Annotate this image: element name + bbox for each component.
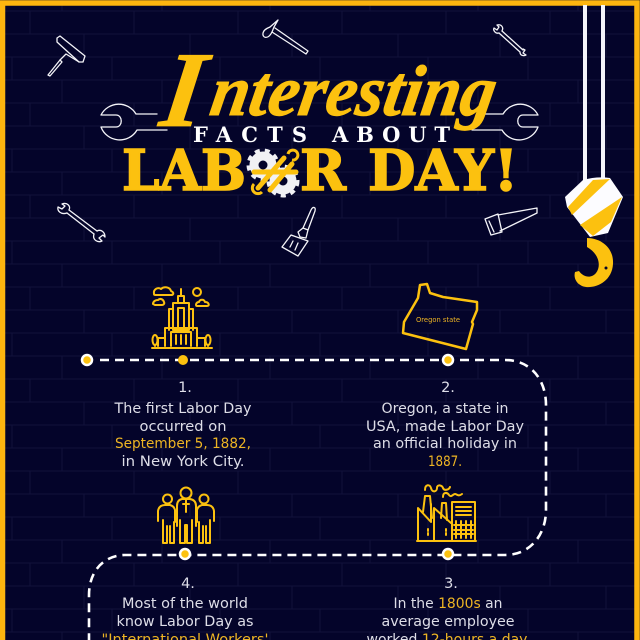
icon: Oregon state map (403, 284, 477, 349)
fact 3 (366, 576, 528, 640)
wrench left (101, 104, 167, 140)
fact number: 1. (178, 380, 192, 396)
fact 2: 1887. (428, 454, 462, 470)
icon: paint brush (282, 207, 315, 256)
fact number: 2. (441, 380, 455, 396)
icon: wrench lower left (58, 203, 105, 242)
fact 4: Most of the world (122, 596, 248, 612)
fact 2: an official holiday in (373, 436, 517, 452)
heading: R: R (300, 138, 346, 204)
icon: hand saw (485, 208, 537, 235)
heading: DAY!: DAY! (368, 138, 518, 204)
fact 3: average employee (382, 614, 515, 630)
icon: paint roller (48, 36, 85, 76)
icon: group of workers (158, 488, 214, 543)
map label: Oregon state (416, 316, 460, 324)
timeline dot 4 (180, 549, 190, 559)
fact 1: in New York City. (122, 454, 244, 470)
timeline path (89, 360, 546, 640)
fact number: 4. (181, 576, 195, 592)
heading: facts about: ABOUT (331, 122, 450, 147)
fact number: 3. (444, 576, 458, 592)
timeline dot start (82, 355, 92, 365)
heading: Interesting (153, 30, 503, 150)
heading: LAB: LAB (122, 138, 246, 204)
heading: facts about (193, 122, 450, 147)
icon: gears with crossed wrenches (248, 150, 298, 196)
fact 1 (114, 380, 252, 470)
timeline dot 3 (443, 549, 453, 559)
heading: Interesting: I (153, 30, 217, 150)
timeline dot 1 (178, 355, 188, 365)
fact 2: Oregon, a state in (382, 401, 508, 417)
fact 3: In the 1800s an (394, 596, 502, 612)
crane ropes (583, 5, 605, 183)
fact 2: USA, made Labor Day (366, 419, 524, 435)
heading: Interesting: nteresting (205, 52, 503, 131)
icon: factory (417, 485, 476, 541)
title (101, 30, 538, 204)
wrench right (472, 104, 538, 140)
timeline dot 2 (443, 355, 453, 365)
icon: crane hook (565, 177, 623, 287)
heading: facts about: FACTS (193, 122, 307, 147)
fact 1: The first Labor Day (114, 401, 252, 417)
fact 4 (102, 576, 268, 640)
fact 2 (366, 380, 524, 470)
fact 4: know Labor Day as (116, 614, 254, 630)
icon: skyscraper (152, 287, 212, 348)
icon: small wrench top right (494, 25, 526, 56)
fact 1: occurred on (140, 419, 226, 435)
icon: hammer (263, 20, 308, 54)
fact 1: September 5, 1882, (115, 436, 251, 452)
